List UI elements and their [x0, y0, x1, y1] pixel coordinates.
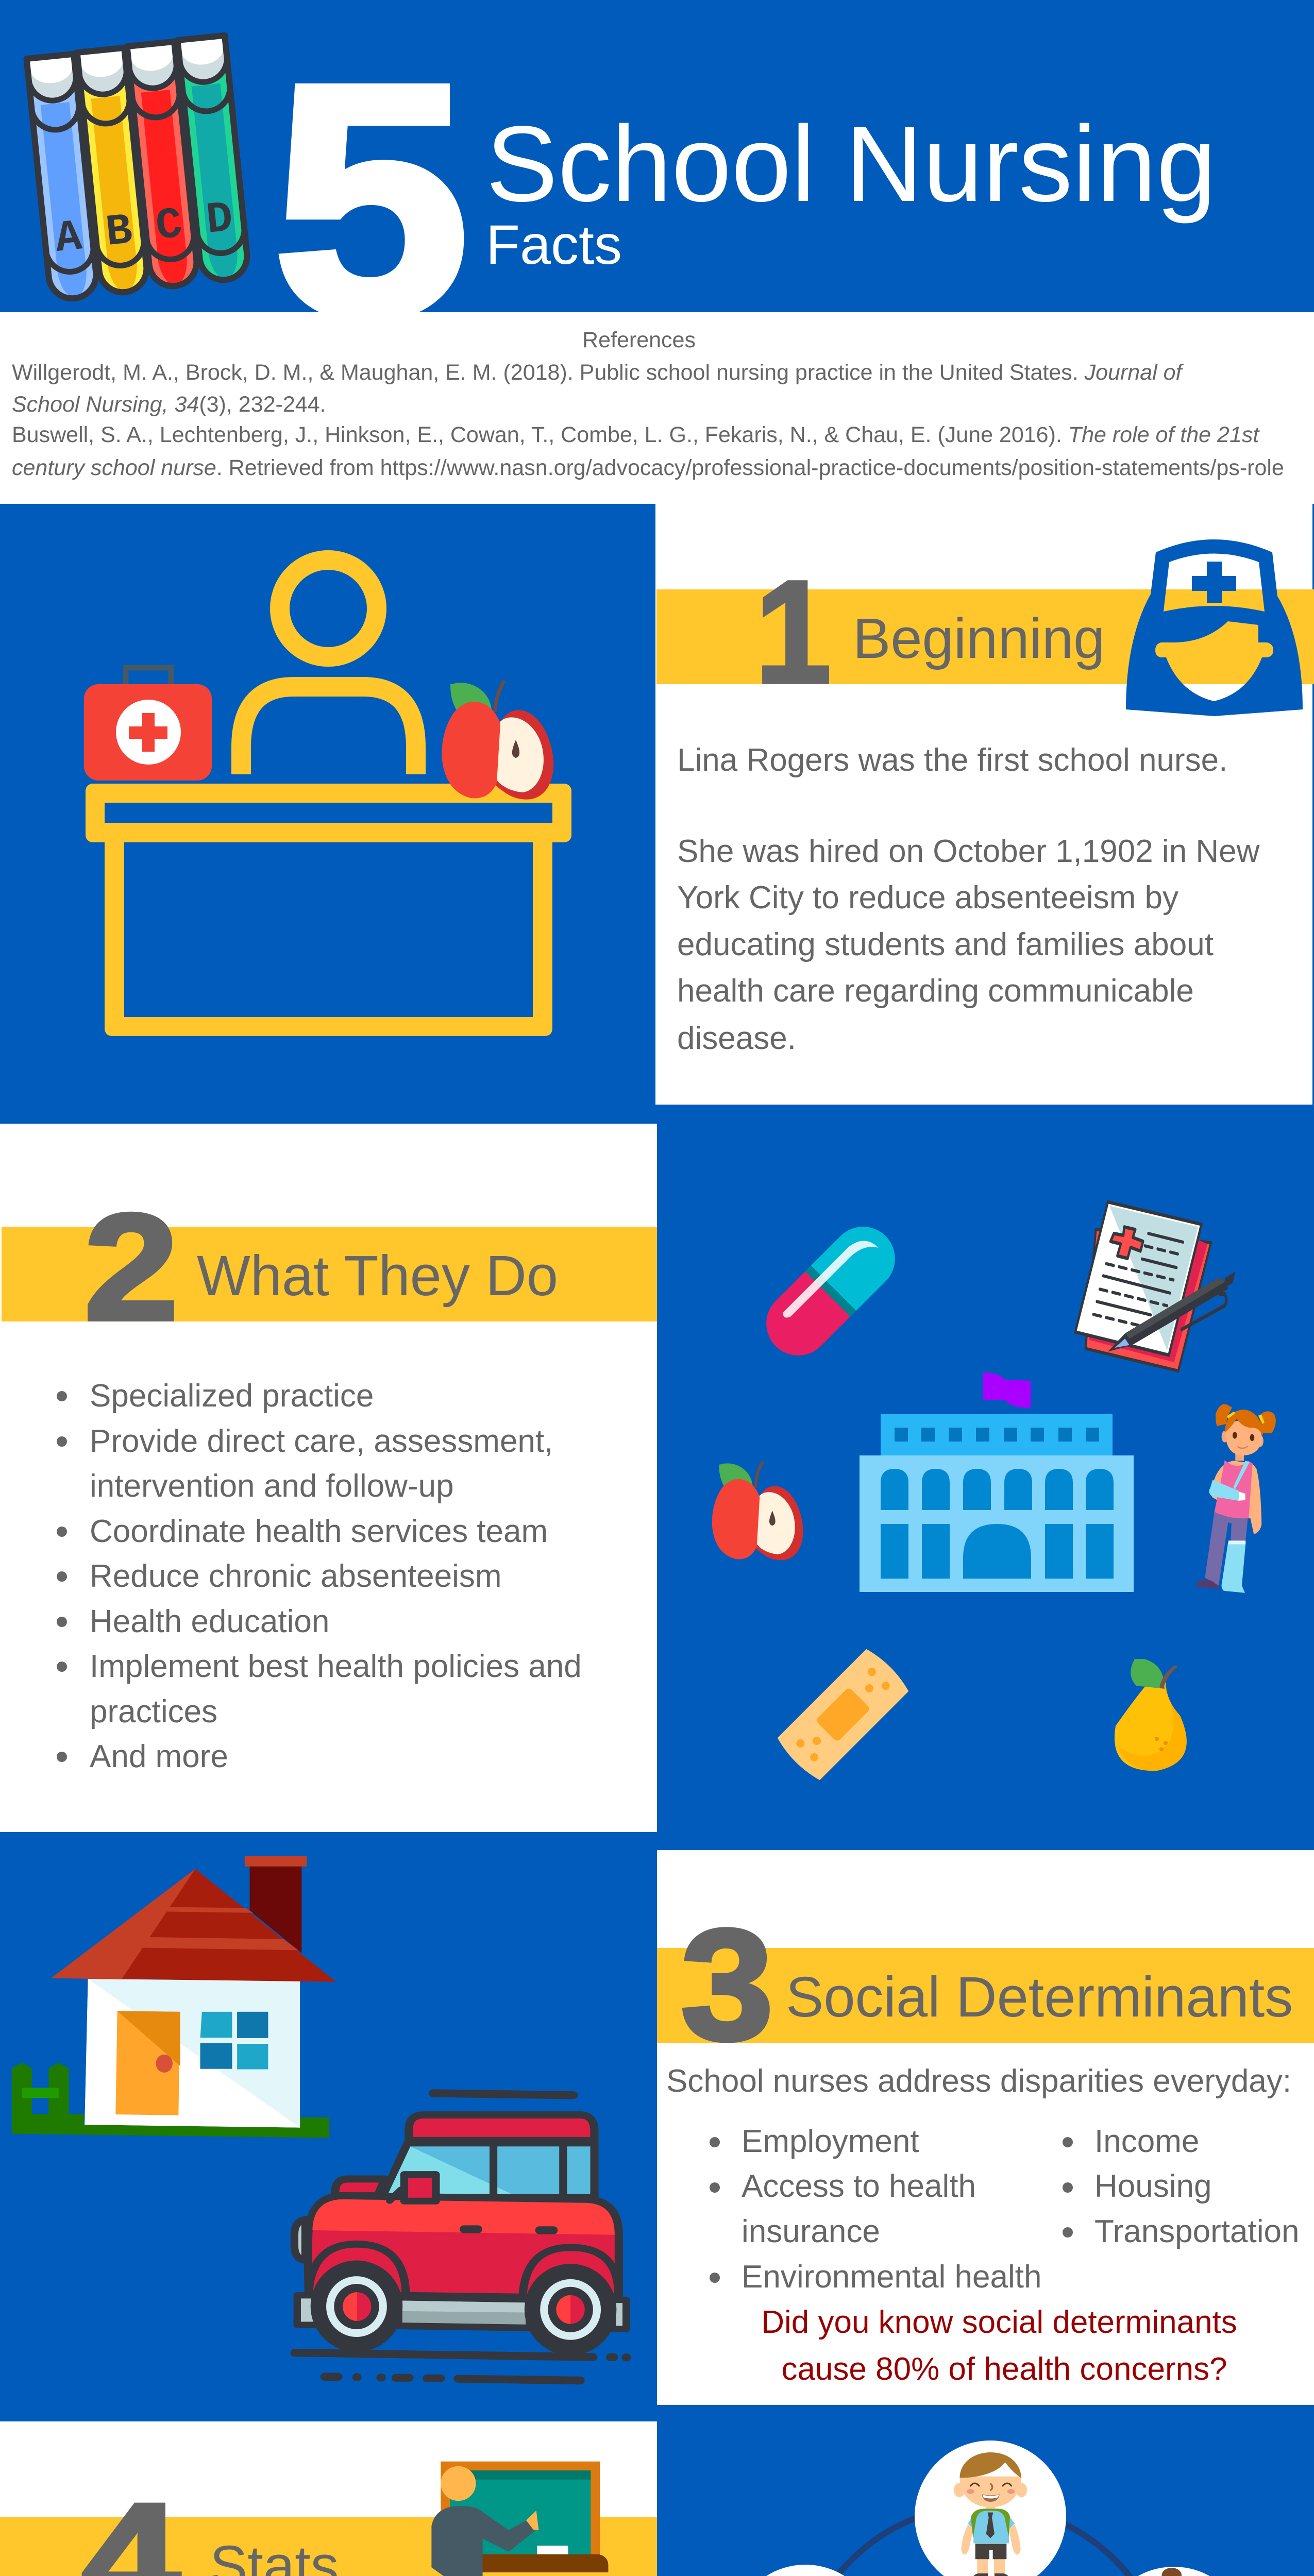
- heading: Social Determinants: [786, 1965, 1293, 2029]
- references text: [12, 360, 1284, 480]
- icon: pear: [1115, 1659, 1187, 1771]
- icon: school building: [860, 1373, 1134, 1592]
- bullet list: Specialized practice: [90, 1378, 374, 1414]
- body text: health care regarding communicable: [677, 973, 1194, 1009]
- panel: header: [0, 0, 1314, 384]
- icon: ABC books: D: [204, 193, 235, 246]
- icon: nurse head: [1126, 539, 1303, 716]
- subtitle: Facts: [486, 213, 622, 276]
- panel: references: [0, 312, 1314, 504]
- icon: bandage: [774, 1646, 912, 1783]
- icon: smiling boy: [915, 2441, 1066, 2576]
- heading band: [2, 1227, 659, 1321]
- icon: person at desk: [86, 560, 571, 1036]
- left bullet list: [710, 2124, 1041, 2295]
- right bullet list: Housing: [1094, 2168, 1211, 2204]
- left bullet list: Access to health: [742, 2168, 976, 2204]
- bullet list: practices: [90, 1694, 217, 1730]
- right bullet list: [1063, 2124, 1299, 2249]
- bullet list: Provide direct care, assessment,: [90, 1423, 553, 1459]
- panel: section 3 text: [657, 1850, 1314, 2405]
- right bullet list: Transportation: [1094, 2214, 1299, 2249]
- references text: School Nursing, 34(3), 232-244.: [12, 392, 326, 417]
- panel: section 1 text: [655, 504, 1314, 1105]
- icon: girl with cast: [1195, 1404, 1276, 1593]
- icon: apple: [712, 1461, 803, 1560]
- right bullet list: Income: [1094, 2124, 1199, 2159]
- big number five: 5: [273, 17, 469, 384]
- panel: section 4 illustration: [657, 2405, 1314, 2576]
- panel: section 3 illustration: [0, 1832, 657, 2421]
- icon: apple: [442, 680, 553, 800]
- left bullet list: Employment: [742, 2124, 919, 2159]
- body text: Lina Rogers was the first school nurse.: [677, 742, 1227, 778]
- icon: ABC books: A: [53, 212, 85, 264]
- bullet list: And more: [90, 1739, 228, 1774]
- references text: Willgerodt, M. A., Brock, D. M., & Maughan, E. M. (2018). Public school nursing practice in the United States. Journal of: [12, 360, 1184, 385]
- bullet list: [57, 1378, 582, 1774]
- panel: section 2 text: [0, 1124, 659, 1832]
- body text: [677, 742, 1260, 1056]
- icon: nurse portrait: [732, 2565, 879, 2576]
- icon: red car: [294, 2093, 627, 2381]
- panel: section 2 illustration: [657, 1105, 1314, 1850]
- intro text: School nurses address disparities everyday:: [666, 2063, 1291, 2099]
- icon: house: [12, 1856, 336, 2138]
- number 3: 3: [681, 1896, 773, 2073]
- icon: medical clipboard and pen: [1075, 1202, 1236, 1371]
- panel: section 4 text: [0, 2421, 657, 2576]
- heading band: [657, 1948, 1314, 2043]
- heading: Beginning: [853, 607, 1105, 670]
- number 1: 1: [755, 551, 831, 713]
- bullet list: Reduce chronic absenteeism: [90, 1558, 502, 1594]
- left bullet list: Environmental health: [742, 2259, 1041, 2295]
- title: School Nursing: [486, 104, 1216, 224]
- callout: [761, 2304, 1237, 2387]
- icon: pill: [753, 1213, 908, 1369]
- heading: What They Do: [197, 1244, 558, 1308]
- ring connector: [797, 2505, 1170, 2576]
- heading band: [0, 2517, 657, 2576]
- references text: century school nurse. Retrieved from https://www.nasn.org/advocacy/professional-practice-documents/position-statements/ps-role: [12, 455, 1284, 480]
- body text: She was hired on October 1,1902 in New: [677, 834, 1260, 869]
- icon: ABC books: B: [104, 206, 134, 258]
- body text: disease.: [677, 1021, 796, 1056]
- left bullet list: insurance: [742, 2214, 880, 2249]
- body text: educating students and families about: [677, 927, 1214, 962]
- bullet list: Coordinate health services team: [90, 1514, 548, 1549]
- icon: girl with bun: [1100, 2567, 1248, 2576]
- bullet list: Health education: [90, 1604, 329, 1639]
- icon: ABC books: [27, 36, 249, 301]
- panel: section 1 illustration: [0, 504, 655, 1124]
- callout: Did you know social determinants: [761, 2304, 1237, 2340]
- references heading: References: [582, 328, 696, 352]
- bullet list: Implement best health policies and: [90, 1649, 582, 1684]
- bullet list: intervention and follow-up: [90, 1468, 454, 1504]
- references text: Buswell, S. A., Lechtenberg, J., Hinkson, E., Cowan, T., Combe, L. G., Fekaris, N., & Chau, E. (June 2016). The role of the 21st: [12, 422, 1260, 447]
- icon: ABC books: C: [154, 199, 184, 252]
- icon: teacher at blackboard: [431, 2462, 608, 2576]
- callout: cause 80% of health concerns?: [781, 2351, 1227, 2387]
- number 2: 2: [84, 1183, 179, 1352]
- heading band: [656, 589, 1314, 684]
- icon: first aid kit: [84, 668, 212, 781]
- body text: York City to reduce absenteeism by: [677, 880, 1178, 916]
